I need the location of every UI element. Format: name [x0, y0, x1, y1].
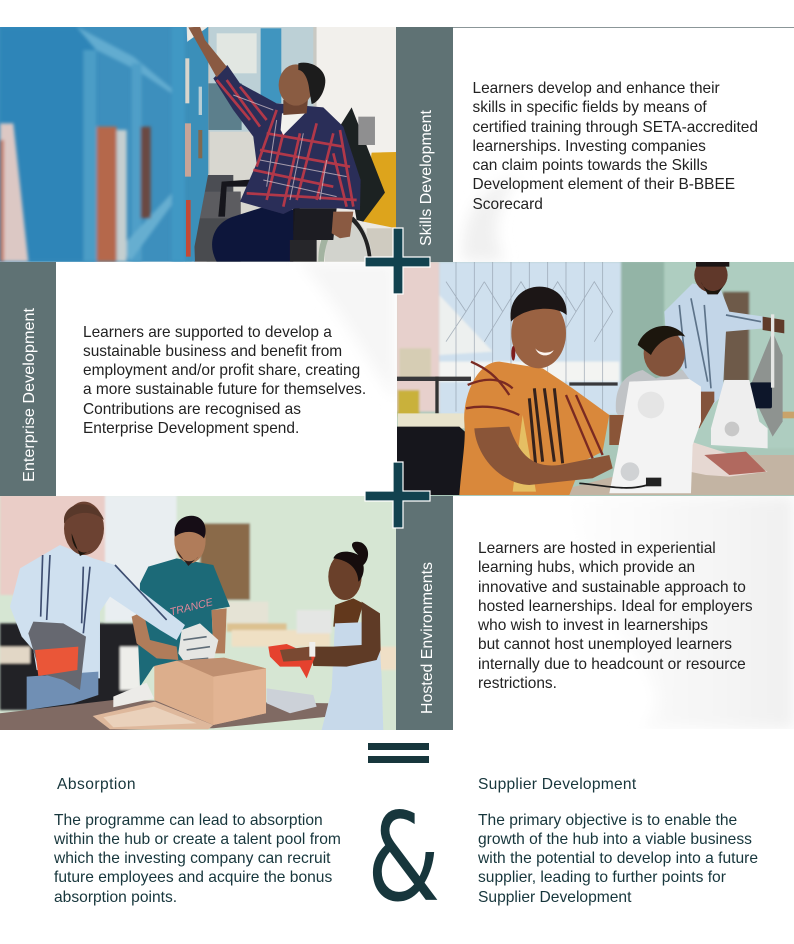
text: absorption: The programme can lead to absorption	[54, 812, 323, 828]
text: hosted environments: Learners are hosted in experiential	[478, 540, 716, 557]
text: hosted environments: restrictions.	[478, 675, 557, 692]
panel backgrounds with soft swooshes	[323, 27, 794, 728]
text: absorption: within the hub or create a talent pool from	[54, 831, 341, 848]
heading: absorption: Absorption	[57, 776, 136, 793]
text: absorption: which the investing company can recruit	[54, 850, 330, 867]
text: absorption: future employees and acquire the bonus	[54, 869, 332, 886]
panel: skills development	[0, 27, 758, 262]
text: supplier development: with the potential to develop into a future	[478, 850, 758, 867]
photo: three people packing fabric into a box	[0, 496, 396, 730]
white tee	[281, 113, 305, 135]
icon: plus between second and third rows	[364, 461, 431, 529]
text: absorption: absorption points.	[54, 889, 177, 906]
text: enterprise development: Contributions are recognised as	[83, 401, 301, 418]
text: supplier development: The primary objective is to enable the	[478, 812, 737, 828]
fabric and thread	[749, 332, 783, 437]
man with striped shirt	[10, 545, 185, 678]
sidebar: hosted environments label: Hosted Environments	[419, 562, 436, 714]
text: absorption	[54, 812, 341, 906]
text: skills development: Development element of their B-BBEE	[472, 176, 735, 193]
text: supplier development: growth of the hub into a viable business	[478, 831, 752, 848]
woman on right	[333, 598, 363, 627]
text: skills development: can claim points towards the Skills	[472, 157, 708, 174]
text: skills development: learnerships. Investing companies	[472, 138, 706, 155]
photo: learner in wheelchair at library shelves	[0, 27, 396, 262]
man standing	[664, 283, 764, 422]
text: supplier development	[478, 812, 758, 906]
text: hosted environments: learning hubs, which provide an	[478, 559, 695, 576]
panel: enterprise development	[0, 262, 794, 496]
text: enterprise development: Enterprise Development spend.	[83, 420, 299, 437]
sidebar: skills development label: Skills Development	[418, 109, 435, 246]
cardboard box	[154, 658, 266, 725]
table	[0, 700, 328, 730]
section: supplier development	[478, 776, 758, 906]
section: absorption	[54, 776, 341, 906]
photo: three people packing fabric into a box: TRANCE	[169, 596, 215, 619]
text: hosted environments: hosted learnerships. Ideal for employers	[478, 598, 753, 615]
wheelchair and trousers	[218, 179, 253, 217]
text: hosted environments: internally due to headcount or resource	[478, 656, 746, 673]
text: skills development: Learners develop and enhance their	[472, 80, 720, 97]
text: hosted environments: innovative and sustainable approach to	[478, 579, 746, 596]
arm, neck and hand	[188, 27, 227, 77]
text: enterprise development: sustainable business and benefit from	[83, 343, 342, 360]
panel: hosted environments	[0, 496, 753, 730]
text: enterprise development: employment and/or profit share, creating	[83, 362, 360, 379]
text: supplier development: Supplier Development	[478, 889, 631, 906]
text: skills development	[472, 80, 758, 213]
sidebar: skills development label	[396, 27, 453, 262]
middle man	[138, 558, 230, 687]
text: hosted environments	[478, 540, 753, 692]
fabric on table	[686, 440, 768, 477]
sidebar: enterprise development label	[0, 262, 56, 496]
main sewing machine	[609, 379, 701, 493]
text: supplier development: supplier, leading to further points for	[478, 869, 726, 886]
clothes held by man	[28, 622, 86, 690]
table	[543, 455, 794, 495]
shirt	[213, 65, 361, 214]
heading: supplier development: Supplier Development	[478, 776, 636, 793]
smiling woman	[459, 362, 609, 495]
text: enterprise development: Learners are supported to develop a	[83, 324, 332, 340]
icon: plus between first and second rows	[364, 227, 431, 295]
icon: equals sign	[368, 743, 429, 763]
photo: women at sewing machines	[397, 262, 794, 496]
text: hosted environments: who wish to invest in learnerships	[478, 617, 708, 634]
text: hosted environments: but cannot host unemployed learners	[478, 636, 732, 653]
woman in background	[616, 370, 696, 435]
text: skills development: certified training through SETA-accredited	[472, 119, 758, 136]
text: skills development: Scorecard	[472, 196, 543, 213]
second sewing machine	[711, 380, 768, 448]
sidebar: enterprise development label: Enterprise Development	[21, 307, 38, 482]
text: enterprise development: a more sustainable future for themselves.	[83, 381, 366, 398]
sidebar: hosted environments label	[396, 496, 453, 730]
text: skills development: skills in specific fields by means of	[472, 99, 707, 116]
text: enterprise development	[83, 324, 366, 437]
